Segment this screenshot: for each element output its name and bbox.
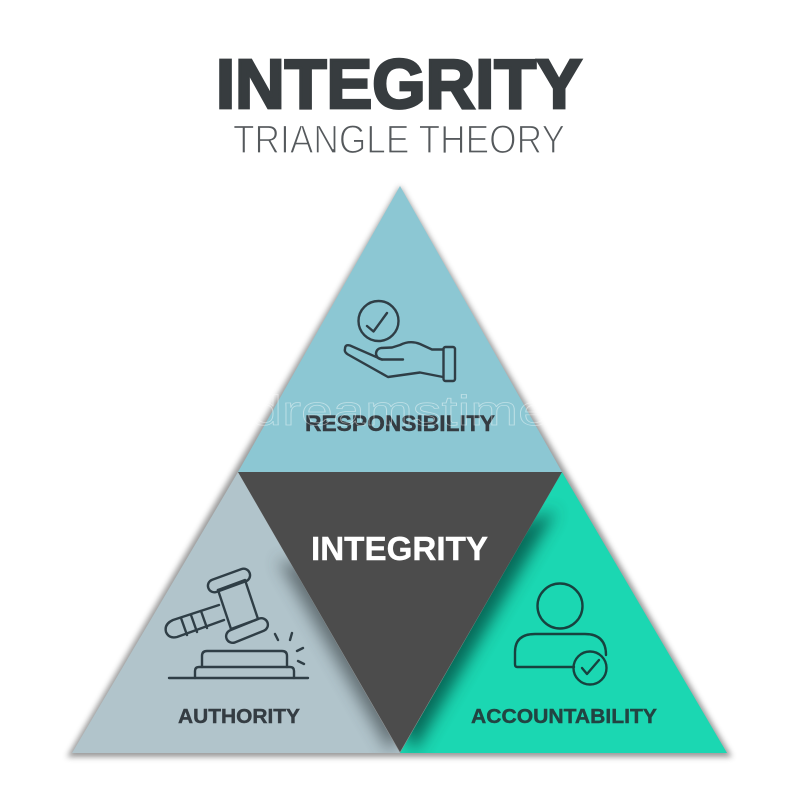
icon: person with check: [515, 584, 606, 684]
label: responsibility: RESPONSIBILITY: [305, 411, 495, 436]
label: integrity: INTEGRITY: [311, 530, 488, 567]
label: accountability: ACCOUNTABILITY: [471, 705, 657, 728]
icon: gavel: [166, 567, 308, 678]
label: authority: AUTHORITY: [178, 705, 300, 728]
panel: authority triangle: [72, 472, 400, 753]
title: INTEGRITY: [216, 45, 582, 123]
panel: responsibility triangle: [238, 186, 562, 472]
panel: accountability triangle: [400, 472, 727, 753]
subtitle: TRIANGLE THEORY: [233, 118, 565, 162]
icon: hand holding check: [345, 301, 455, 381]
watermark: dreamstime: [250, 387, 550, 434]
panel: integrity centre triangle: [238, 472, 562, 752]
pyramid outer shadow: [67, 186, 732, 757]
